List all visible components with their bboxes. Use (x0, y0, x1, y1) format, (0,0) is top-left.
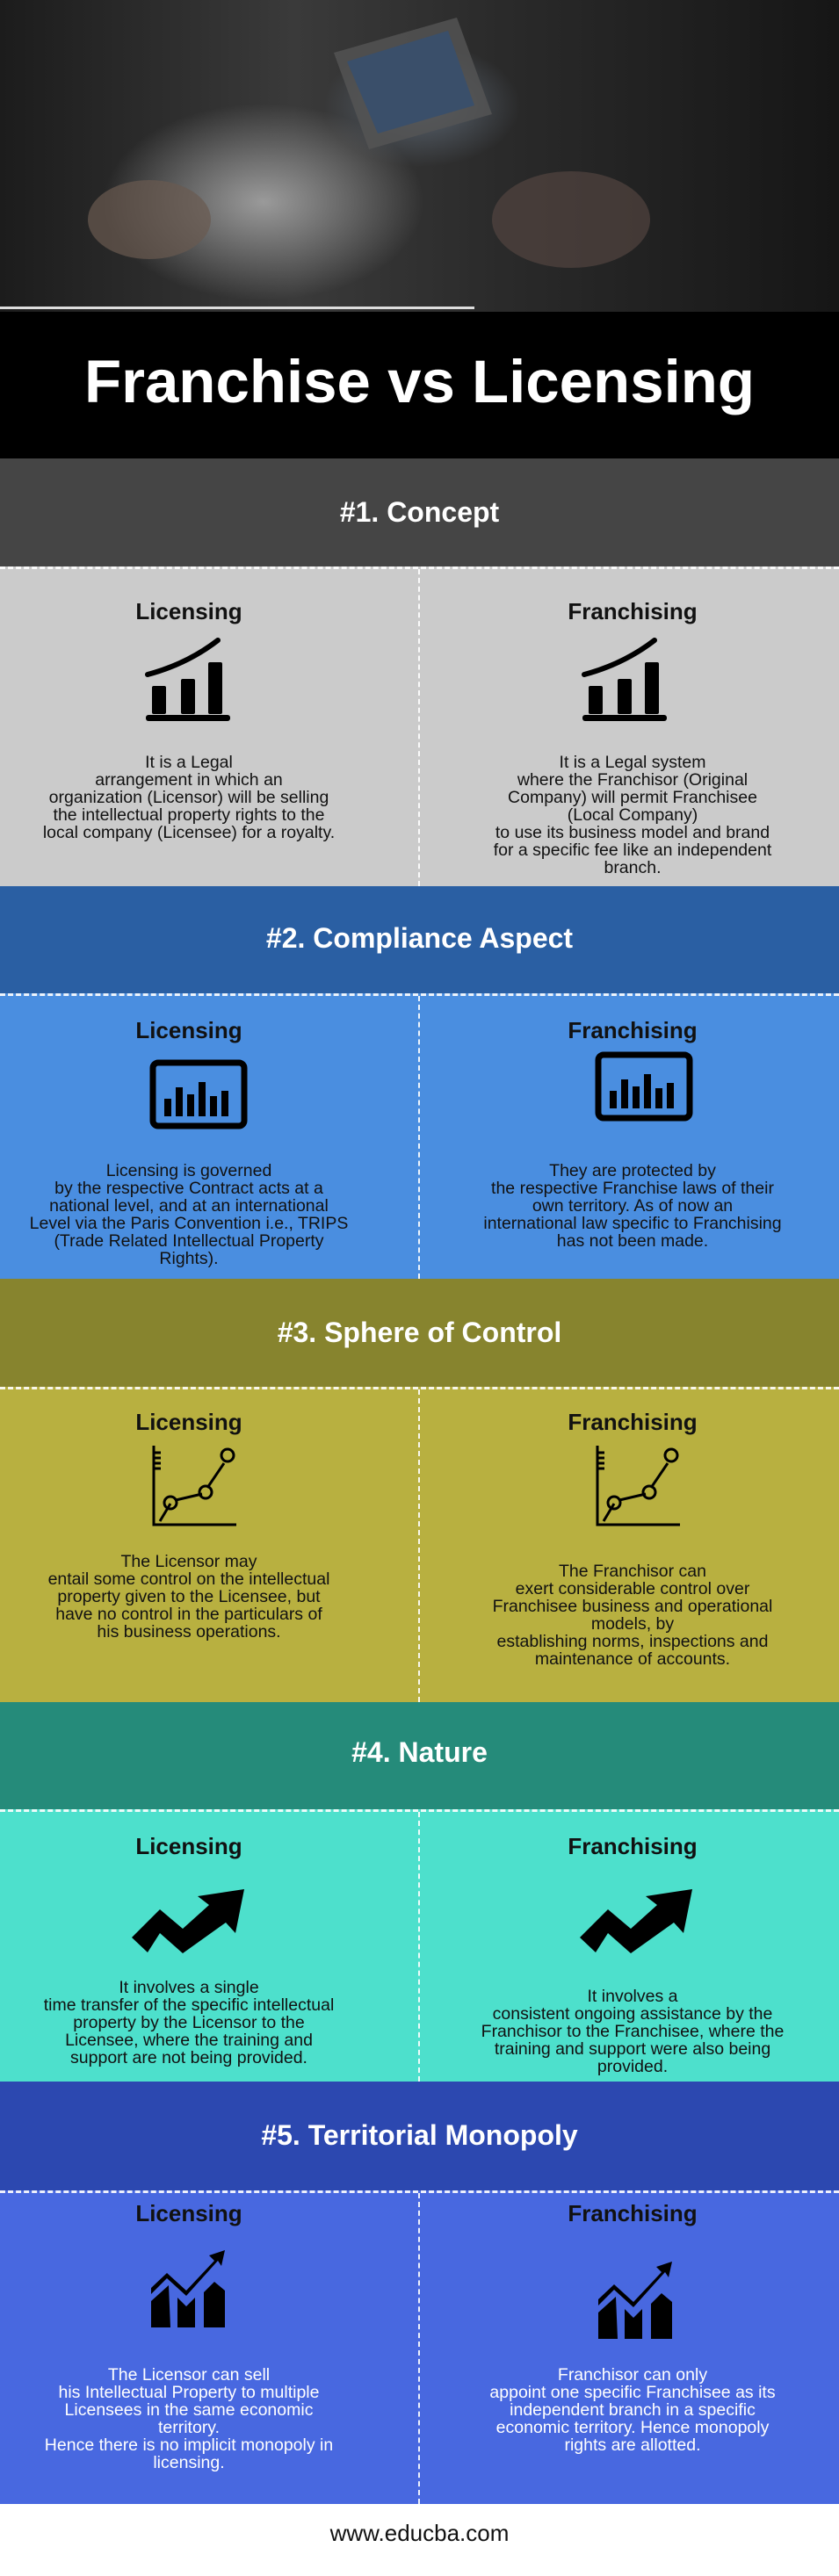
label: licensing: Licensing (135, 2200, 242, 2226)
text: franchising concept: to use its business model and brand (495, 823, 770, 842)
label: franchising: Franchising (568, 2200, 698, 2226)
text: licensing monopoly: Licensees in the same economic (65, 2400, 313, 2420)
text: franchising monopoly: independent branch in a specific (510, 2400, 756, 2420)
text: franchising monopoly: appoint one specific Franchisee as its (489, 2383, 776, 2402)
panel: compliance (0, 993, 839, 1279)
icon: line chart left (153, 1446, 236, 1526)
text: franchising control: The Franchisor can (559, 1562, 706, 1581)
label: franchising: Franchising (568, 1017, 698, 1043)
icon: growth chart right (598, 2262, 672, 2339)
label: licensing: Licensing (135, 1833, 242, 1859)
section 2 header: #2. Compliance Aspect (266, 922, 573, 954)
panel: nature (0, 1809, 839, 2082)
section 5 header: #5. Territorial Monopoly (261, 2119, 578, 2151)
text: franchising control (493, 1562, 772, 1669)
text: franchising concept: It is a Legal system (560, 753, 705, 772)
text: licensing nature (44, 1978, 334, 2067)
text: licensing monopoly: licensing. (153, 2453, 225, 2472)
text: franchising nature: consistent ongoing assistance by the (493, 2004, 772, 2024)
text: licensing monopoly: The Licensor can sell (108, 2365, 270, 2385)
label: franchising: Franchising (568, 1409, 698, 1435)
text: franchising concept: where the Franchisor (Original (517, 770, 748, 790)
icon: zigzag arrow left (132, 1889, 244, 1953)
text: franchising compliance: international law specific to Franchising (483, 1214, 782, 1233)
section 4 header (0, 1702, 839, 1810)
text: franchising nature: It involves a (588, 1987, 677, 2006)
text: franchising compliance: They are protected by (549, 1161, 716, 1180)
text: licensing nature: support are not being provided. (70, 2048, 307, 2067)
text: franchising concept: (Local Company) (568, 805, 698, 825)
panel: sphere of control (0, 1387, 839, 1702)
text: licensing monopoly: Hence there is no implicit monopoly in (45, 2435, 333, 2455)
text: licensing compliance: (Trade Related Intellectual Property (54, 1231, 324, 1251)
text: franchising compliance: own territory. As of now an (532, 1196, 733, 1216)
text: licensing concept: arrangement in which an (95, 770, 283, 790)
text: licensing concept: the intellectual property rights to the (54, 805, 324, 825)
text: licensing control: entail some control on the intellectual (48, 1569, 329, 1589)
text: licensing monopoly: his Intellectual Property to multiple (58, 2383, 319, 2402)
section 1 header (0, 458, 839, 568)
text: licensing compliance (30, 1161, 348, 1268)
text: licensing concept: local company (Licensee) for a royalty. (43, 823, 335, 842)
text: franchising nature: training and support were also being (495, 2039, 770, 2059)
text: franchising compliance (483, 1161, 782, 1251)
photo banner (0, 0, 839, 312)
panel: territorial monopoly (0, 2190, 839, 2504)
text: franchising monopoly: Franchisor can only (558, 2365, 707, 2385)
text: franchising nature (481, 1987, 784, 2076)
text: franchising nature: Franchisor to the Franchisee, where the (481, 2022, 784, 2041)
text: licensing concept: organization (Licensor) will be selling (49, 788, 329, 807)
title band (0, 312, 839, 458)
text: licensing concept (43, 753, 335, 842)
icon: zigzag arrow right (580, 1889, 692, 1953)
section 1 header: #1. Concept (340, 496, 499, 528)
section 3 header: #3. Sphere of Control (278, 1317, 561, 1348)
icon: bar chart left (145, 638, 230, 721)
section 5 header (0, 2082, 839, 2191)
text: licensing nature: time transfer of the specific intellectual (44, 1995, 334, 2015)
text: franchising monopoly: rights are allotted. (564, 2435, 701, 2455)
text: franchising compliance: the respective Franchise laws of their (491, 1179, 774, 1198)
text: franchising concept: branch. (604, 858, 662, 877)
section 4 header: #4. Nature (351, 1736, 488, 1768)
text: franchising concept: for a specific fee like an independent (494, 841, 771, 860)
icon: line chart right (596, 1446, 680, 1526)
text: franchising control: establishing norms, inspections and (497, 1632, 768, 1651)
text: licensing control: The Licensor may (121, 1552, 257, 1571)
label: licensing: Licensing (135, 598, 242, 624)
icon: growth chart left (151, 2250, 225, 2327)
text: licensing concept: It is a Legal (145, 753, 233, 772)
text: franchising concept: Company) will permit Franchisee (508, 788, 757, 807)
text: licensing control: property given to the Licensee, but (57, 1587, 321, 1606)
text: franchising monopoly: economic territory. Hence monopoly (496, 2418, 769, 2437)
icon: bar chart right (582, 638, 667, 721)
text: franchising control: models, by (591, 1614, 674, 1634)
text: licensing control (48, 1552, 329, 1642)
label: licensing: Licensing (135, 1409, 242, 1435)
text: franchising control: exert considerable control over (516, 1579, 749, 1598)
text: licensing monopoly: territory. (158, 2418, 220, 2437)
text: licensing monopoly (45, 2365, 333, 2472)
text: licensing compliance: by the respective Contract acts at a (54, 1179, 323, 1198)
text: licensing compliance: national level, and at an international (49, 1196, 329, 1216)
text: licensing compliance: Level via the Paris Convention i.e., TRIPS (30, 1214, 348, 1233)
footer: website: www.educba.com (330, 2520, 509, 2546)
text: licensing control: his business operations. (97, 1622, 281, 1642)
text: licensing nature: It involves a single (119, 1978, 259, 1997)
text: franchising nature: provided. (597, 2057, 668, 2076)
text: licensing nature: Licensee, where the training and (65, 2031, 313, 2050)
text: licensing nature: property by the Licensor to the (73, 2013, 305, 2032)
text: franchising control: maintenance of accounts. (535, 1649, 730, 1669)
text: franchising compliance: has not been made. (557, 1231, 708, 1251)
label: licensing: Licensing (135, 1017, 242, 1043)
text: licensing compliance: Licensing is governed (106, 1161, 271, 1180)
title band: Franchise vs Licensing (84, 348, 755, 415)
panel: concept (0, 566, 839, 886)
text: licensing compliance: Rights). (159, 1249, 219, 1268)
icon: dashboard left (149, 1059, 248, 1129)
text: franchising concept (494, 753, 771, 877)
text: licensing control: have no control in the particulars of (55, 1605, 322, 1624)
text: franchising control: Franchisee business and operational (493, 1597, 772, 1616)
text: franchising monopoly (489, 2365, 776, 2455)
section 3 header (0, 1279, 839, 1389)
label: franchising: Franchising (568, 1833, 698, 1859)
section 2 header (0, 886, 839, 994)
label: franchising: Franchising (568, 598, 698, 624)
icon: dashboard right (596, 1052, 692, 1121)
